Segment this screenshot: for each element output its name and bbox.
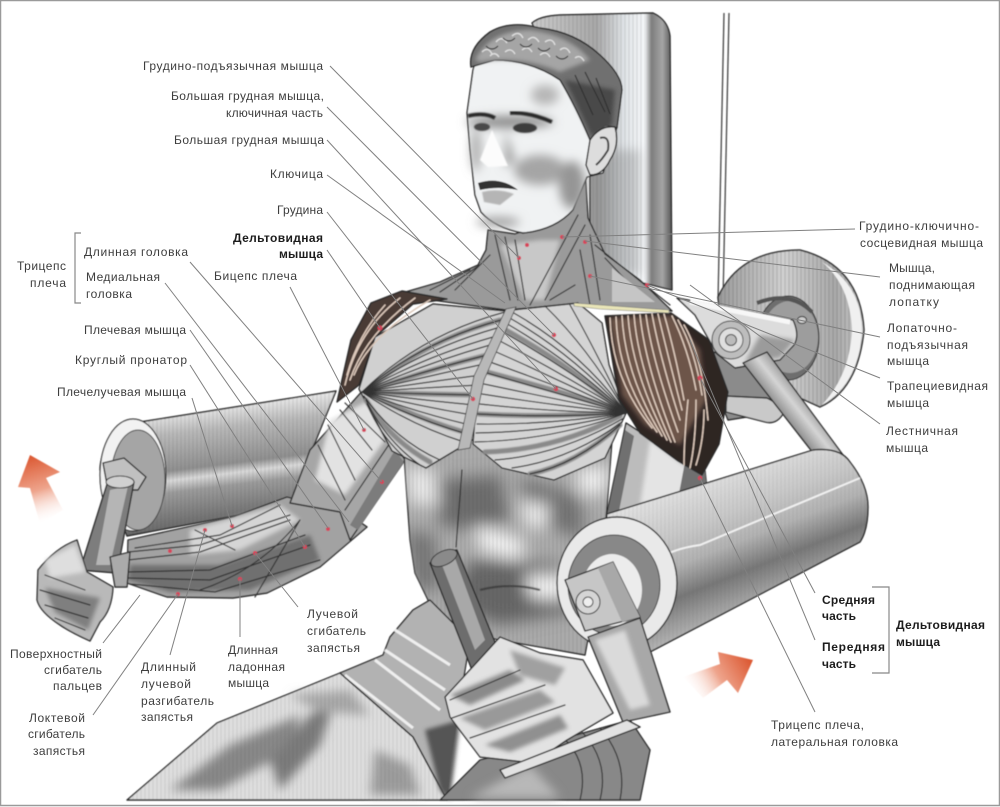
torso: [403, 440, 612, 655]
labels: left column: Дельтовидная: [233, 231, 323, 245]
labels: deltoid parts: мышца: [896, 635, 940, 649]
head: [466, 25, 622, 233]
hair curls: [482, 33, 584, 61]
labels: left column: Медиальная: [86, 270, 160, 284]
labels: deltoid parts: Трицепс плеча,: [771, 718, 864, 732]
right pad cylinder: [557, 450, 868, 652]
labels: deltoid parts: Средняя: [822, 593, 875, 607]
labels: left column: Большая грудная мышца: [174, 133, 324, 147]
left forearm: [127, 497, 367, 598]
labels: forearm: Длинная: [228, 643, 278, 657]
hair: [471, 25, 622, 140]
labels: right column: мышца: [887, 354, 929, 368]
right upper arm: [605, 423, 707, 523]
labels: deltoid parts: [771, 593, 985, 749]
arrow: right: [683, 652, 753, 698]
labels: forearm: сгибатель: [28, 727, 85, 741]
neck and trapezius: [395, 170, 672, 311]
labels: forearm: мышца: [228, 676, 269, 690]
machine: weight disc: [718, 250, 864, 407]
labels: deltoid parts: часть: [822, 657, 856, 671]
labels: left column: Грудина: [277, 203, 323, 217]
labels: forearm: сгибатель: [307, 624, 366, 638]
labels: right column: мышца: [886, 441, 928, 455]
labels: right column: сосцевидная мышца: [860, 236, 983, 250]
brows, eyes: [468, 113, 552, 122]
bracket plate below hand: [500, 720, 640, 778]
labels: deltoid parts: Передняя: [822, 640, 885, 654]
labels: right column: Лестничная: [886, 424, 958, 438]
machine: pressure bar: [677, 298, 806, 368]
labels: right column: мышца: [887, 396, 929, 410]
labels: forearm: запястья: [307, 641, 360, 655]
machine: hub: [757, 296, 819, 380]
labels: right column: поднимающая: [889, 278, 975, 292]
labels: left column: Плечевая мышца: [84, 323, 186, 337]
labels: deltoid parts: часть: [822, 609, 856, 623]
labels: left column: Плечелучевая мышца: [57, 385, 186, 399]
labels: left column: Большая грудная мышца,: [171, 89, 324, 103]
machine: lever arm: [743, 352, 860, 490]
arrow: left up: [18, 455, 63, 524]
labels: forearm: лучевой: [141, 677, 191, 691]
centre handle: [428, 546, 497, 670]
labels: right column: подъязычная: [887, 338, 968, 352]
bracket: triceps: [75, 233, 81, 303]
labels: left column: мышца: [279, 247, 323, 261]
labels: left column: плеча: [30, 276, 66, 290]
labels: right column: Трапециевидная: [887, 379, 988, 393]
pelvis folds: [340, 600, 470, 800]
mouth: [478, 181, 518, 190]
left handle and bracket: [80, 458, 146, 573]
left thigh: [127, 673, 447, 800]
labels: left column: Ключица: [270, 167, 323, 181]
machine: support under bar: [700, 350, 790, 420]
labels: left column: ключичная часть: [226, 106, 323, 120]
right thigh: [440, 720, 650, 800]
cable: [718, 13, 729, 300]
right deltoid: [605, 313, 728, 475]
left upper arm: [290, 388, 405, 540]
labels: forearm: Лучевой: [307, 607, 358, 621]
labels: right column: [859, 219, 988, 455]
labels: left column: Круглый пронатор: [75, 353, 187, 367]
labels: forearm: сгибатель: [44, 663, 102, 677]
leader lines: [93, 66, 880, 715]
labels: forearm: Поверхностный: [10, 647, 102, 661]
labels: left column: Бицепс плеча: [214, 269, 297, 283]
left pectoral: [359, 304, 506, 468]
labels: left column: Грудино-подъязычная мышца: [143, 59, 323, 73]
labels: forearm: запястья: [141, 710, 193, 724]
labels: forearm: разгибатель: [141, 694, 214, 708]
labels: left column: Трицепс: [17, 259, 66, 273]
machine: lower bar: [726, 396, 783, 423]
nose: [480, 130, 508, 167]
left deltoid: [337, 291, 447, 402]
labels: right column: Мышца,: [889, 261, 935, 275]
clavicle highlight: [574, 303, 669, 313]
sternum: [458, 307, 516, 450]
labels: deltoid parts: Дельтовидная: [896, 618, 985, 632]
right pectoral: [458, 303, 626, 480]
ear: [586, 127, 617, 175]
labels: left column: [17, 59, 324, 399]
right bracket: [565, 562, 670, 722]
right hand: [445, 637, 613, 763]
left pad cylinder: [100, 391, 336, 536]
labels: forearm: Длинный: [141, 660, 196, 674]
labels: forearm: Локтевой: [29, 711, 85, 725]
labels: forearm: ладонная: [228, 660, 285, 674]
left hand: [37, 540, 130, 641]
labels: left column: Длинная головка: [84, 245, 188, 259]
seat back pad: [532, 13, 672, 290]
labels: forearm: [10, 607, 366, 758]
labels: right column: лопатку: [889, 295, 939, 309]
labels: left column: головка: [86, 287, 132, 301]
labels: right column: Грудино-ключично-: [859, 219, 979, 233]
labels: forearm: пальцев: [53, 679, 102, 693]
labels: forearm: запястья: [33, 744, 85, 758]
bracket: deltoid parts: [872, 587, 889, 673]
labels: right column: Лопаточно-: [887, 321, 957, 335]
labels: deltoid parts: латеральная головка: [771, 735, 898, 749]
